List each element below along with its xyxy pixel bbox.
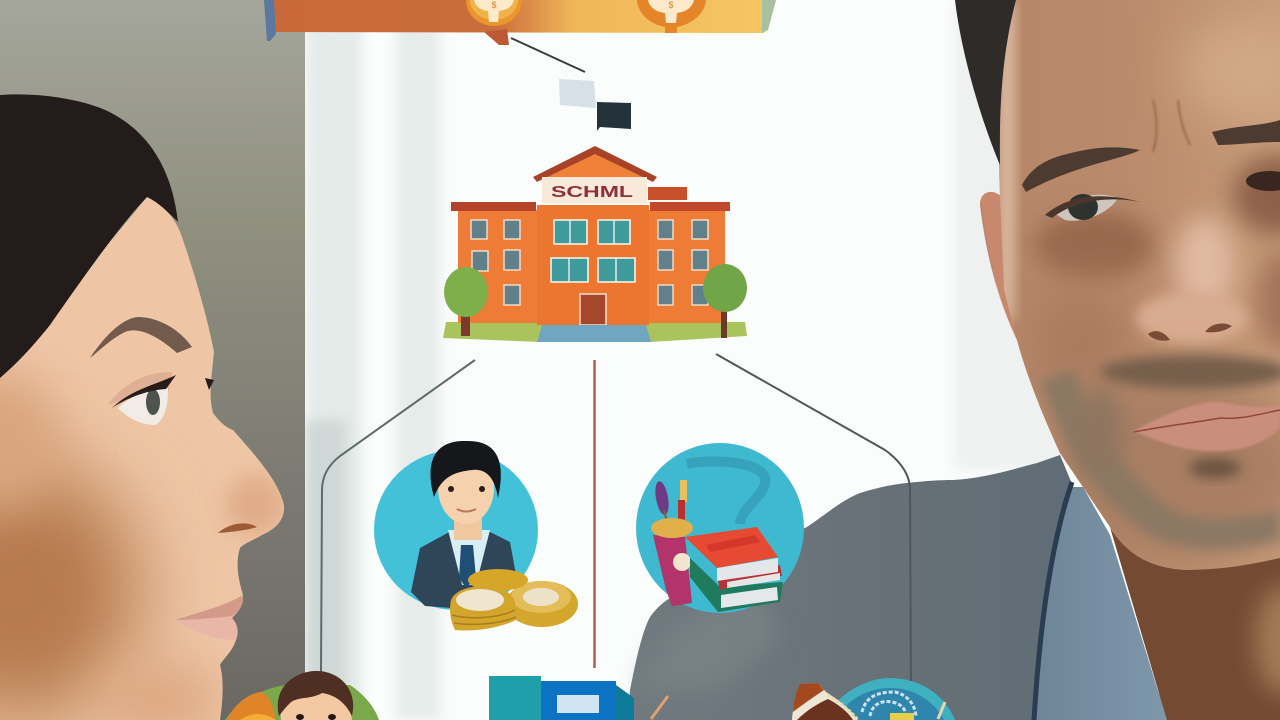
school sign: SCHML	[551, 184, 633, 201]
ear	[981, 192, 1017, 340]
icon: child with food, bottom left	[225, 671, 379, 720]
man's face	[955, 0, 1280, 720]
eye	[108, 372, 214, 425]
eye right	[1246, 171, 1280, 191]
brain pattern	[862, 692, 916, 716]
connector: centre branch	[593, 360, 596, 668]
icon: dollar coin right	[637, 0, 706, 33]
lips	[175, 595, 243, 640]
icon: books and supplies	[636, 443, 804, 613]
book stack	[685, 527, 783, 612]
stubble	[1040, 370, 1280, 549]
icon: right tree	[703, 264, 747, 338]
cup with brushes	[651, 480, 693, 606]
shirt collar	[1035, 487, 1167, 720]
connector: right branch	[716, 354, 911, 690]
windows	[471, 220, 708, 305]
icon: dollar coin left	[466, 0, 522, 26]
man's shirt	[628, 455, 1170, 720]
icon: left tree	[444, 267, 488, 336]
forehead creases	[1153, 100, 1190, 152]
eyebrow	[90, 317, 192, 358]
connector: left branch	[321, 360, 475, 672]
banner fragment at top	[264, 0, 776, 45]
neck	[1105, 520, 1280, 720]
icon: dollar coin right: $	[668, 0, 674, 10]
lower face	[1050, 380, 1280, 560]
woman in profile	[0, 94, 300, 720]
connector: banner to flags	[511, 38, 585, 72]
coins	[450, 569, 578, 631]
businessman	[411, 441, 517, 610]
neck and head	[960, 0, 1280, 720]
icon: blue folders, bottom centre	[489, 676, 668, 720]
nostrils	[1148, 324, 1232, 341]
icon: food and brain, bottom right	[792, 678, 955, 720]
football	[792, 683, 858, 720]
hair	[0, 94, 178, 378]
icon: school building	[443, 146, 747, 342]
lips	[1133, 402, 1280, 451]
icon: businessman with coins	[374, 441, 578, 631]
face	[0, 180, 300, 720]
eyebrow left	[1022, 147, 1140, 192]
icon: dollar coin left: $	[491, 0, 497, 10]
nostril	[218, 523, 257, 533]
eyebrow right	[1212, 120, 1280, 145]
hair	[955, 0, 1016, 165]
eye left	[1045, 194, 1140, 221]
icon: flags	[559, 79, 631, 131]
